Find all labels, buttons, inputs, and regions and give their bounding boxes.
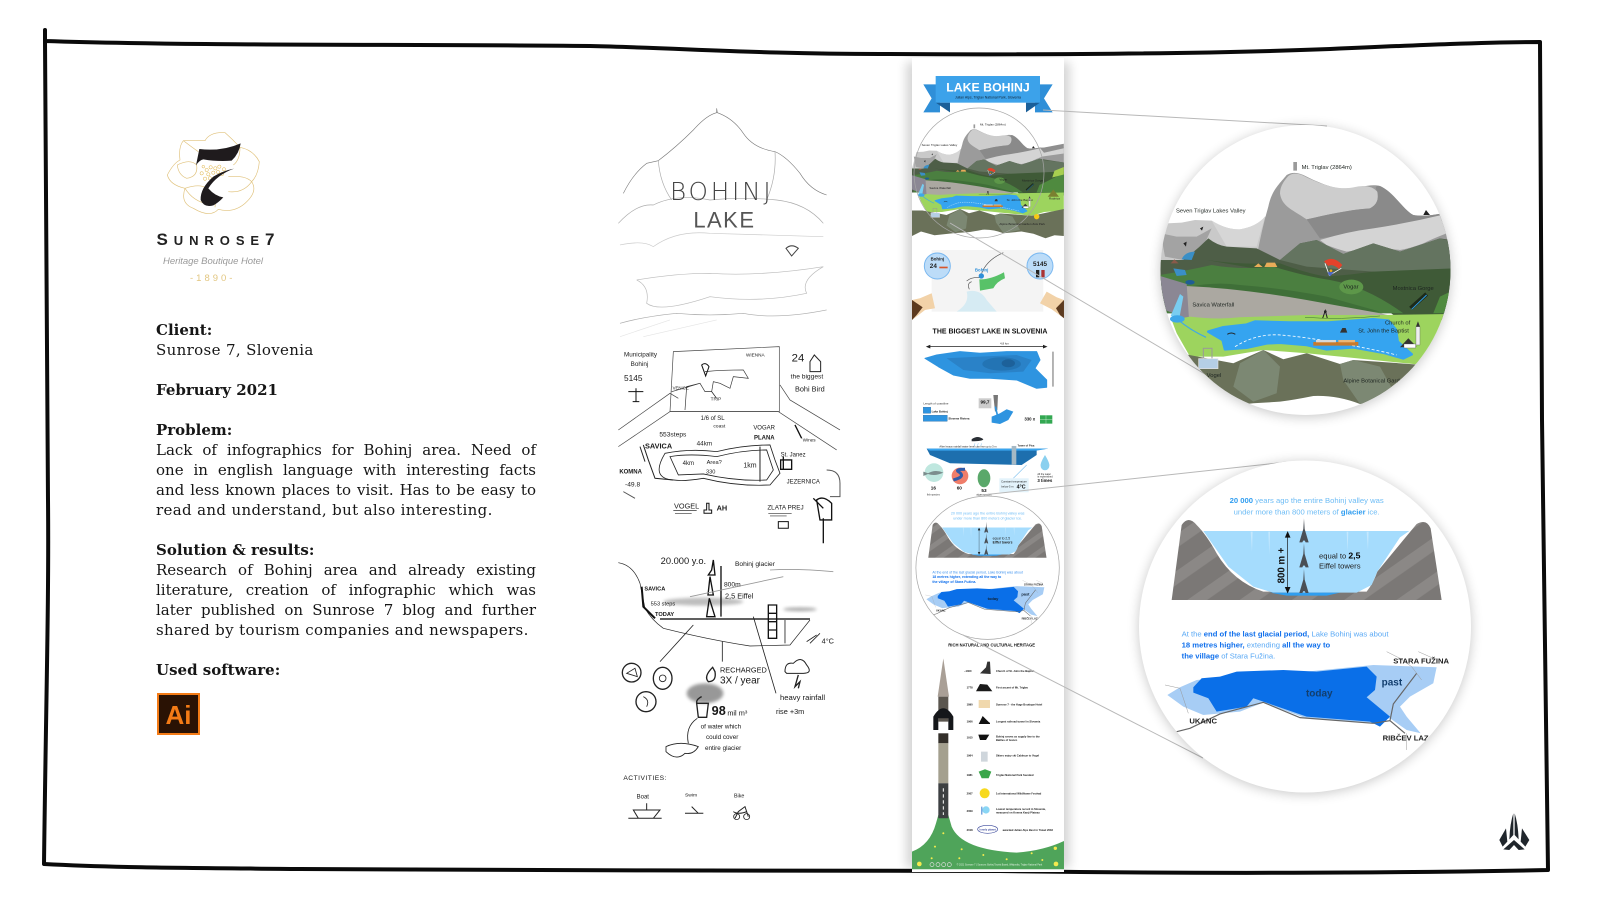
timeline entries: 1964: [967, 754, 973, 758]
hand sketch: first page (title, map, lake): KOMNA: [619, 469, 643, 475]
hand sketch: second page (glacier, rainfall, activities): 800m: [724, 582, 741, 589]
hand sketch: first page (title, map, lake): St. Janez: [781, 453, 806, 459]
biggest lake section: Lake Bohinj: [932, 409, 948, 413]
connector lines from infographic to enlargements: [950, 110, 1327, 758]
cross-section section: is replenished: [1037, 476, 1053, 479]
hand sketch: first page (title, map, lake): 553steps: [659, 432, 687, 439]
timeline entries: 1915: [967, 735, 973, 739]
timeline entries: Skiers enjoy ski Cablecar to Vogel: [996, 754, 1039, 758]
sketch lettering: title: BOHINJ: [670, 177, 777, 206]
hand sketch: first page (title, map, lake): WIENNA: [746, 353, 766, 358]
hand sketch: second page (glacier, rainfall, activities): could cover: [706, 734, 738, 741]
fish icon: [925, 463, 943, 482]
location map section: [912, 250, 1064, 320]
glacier lens thumbnail: past: [1021, 591, 1030, 596]
project description: Problem:: [156, 420, 232, 438]
scene thumbnail labels: Rudnica: [1049, 196, 1060, 200]
hand sketch: second page (glacier, rainfall, activities): entire glacier: [705, 745, 741, 752]
software badge: Adobe Illustrator: Ai: [166, 700, 192, 730]
location map section: 24: [930, 263, 937, 270]
hand sketch: first page (title, map, lake): -49.8: [625, 482, 640, 489]
hand sketch: first page (title, map, lake): TRIP: [711, 397, 721, 402]
timeline icons: lonely planet: [980, 828, 996, 832]
hand sketch: first page (title, map, lake): 1km: [743, 462, 757, 469]
client logo: Sunrose 7: [156, 133, 274, 284]
biggest lake section: Length of coastline: [923, 401, 949, 405]
location map section: Bohinj: [975, 267, 988, 272]
timeline entries: 1778: [967, 686, 973, 690]
logo tagline: Heritage Boutique Hotel: [163, 256, 264, 267]
timeline entries: 1906: [967, 719, 973, 723]
project description: later published on Sunrose 7 blog and further: [156, 600, 536, 618]
hand sketch: first page (title, map, lake): Area?: [707, 460, 722, 466]
cross-section section: After heavy rainfall water level can rise up to 3 m: [939, 444, 997, 448]
timeline entries: Triglav National Park founded: [996, 773, 1034, 777]
cross-section section: below 5 m: [1001, 484, 1014, 488]
lake area fact: 330 x: [1024, 417, 1036, 422]
hand sketch: second page (glacier, rainfall, activities): Boat: [637, 794, 649, 800]
scene labels: Vogar: [1343, 285, 1359, 291]
glacier lens thumbnail: 18 metres higher, extending all the way to: [932, 575, 1001, 579]
cross-section section: Tower of Pisa: [1017, 444, 1035, 448]
glacier labels: the village of Stara Fužina.: [1182, 651, 1275, 660]
hand sketch: second page (glacier, rainfall, activities): 4°C: [822, 636, 835, 645]
cross-section section: Constant temperature: [1001, 480, 1027, 484]
hand sketch: first page (title, map, lake): 330: [706, 469, 715, 475]
scene labels: Church of: [1385, 320, 1411, 326]
hand sketch: first page (title, map, lake): 4km: [683, 461, 694, 467]
glacier labels: under more than 800 meters of glacier ice.: [1234, 507, 1380, 516]
glacier labels: 800 m +: [1277, 547, 1288, 583]
project description: Solution & results:: [156, 540, 314, 558]
hand sketch: second page (glacier, rainfall, activities): RECHARGED: [720, 665, 767, 674]
glacier labels: UKANC: [1189, 716, 1217, 725]
glacier lens thumbnail: [925, 512, 1047, 623]
glacier labels: 18 metres higher, extending all the way to: [1182, 640, 1331, 649]
timeline heading: RICH NATURAL AND CULTURAL HERITAGE: [948, 643, 1035, 648]
timeline entries: Church of St. John the Baptist: [996, 669, 1034, 673]
scene labels: Mostnica Gorge: [1393, 286, 1434, 292]
scene thumbnail labels: Seven Triglav Lakes Valley: [922, 143, 958, 147]
hand sketch: second page (glacier, rainfall, activities): ACTIVITIES:: [623, 775, 667, 782]
glacier lens thumbnail: RIBČEV LAZ: [1022, 615, 1038, 620]
hand sketch: second page (glacier, rainfall, activities): Swim: [685, 793, 697, 799]
project description: Sunrose 7, Slovenia: [156, 340, 314, 358]
timeline entries: First ascent of Mt. Triglav: [996, 686, 1029, 690]
project description: shared by tourism companies and newspapers.: [156, 620, 529, 638]
project description: and less known places to visit. Has to be easy to: [156, 480, 536, 498]
hand sketch: second page (glacier, rainfall, activities): 553 steps: [651, 602, 675, 608]
scene labels: Savica Waterfall: [1192, 303, 1234, 309]
volume infographic: [979, 398, 991, 408]
hand sketch: first page (title, map, lake): Municipality: [624, 352, 658, 359]
hand sketch: second page (glacier, rainfall, activities): Bohinj glacier: [735, 561, 776, 568]
glacier lens thumbnail: under more than 800 meters of glacier ice.: [953, 517, 1022, 521]
project description: literature, creation of infographic which was: [156, 580, 536, 598]
hand sketch: first page (title, map, lake): AH: [717, 504, 727, 513]
project description: Research of Bohinj area and already existing: [156, 560, 536, 578]
scene thumbnail labels: Savica Waterfall: [929, 186, 951, 190]
project description: February 2021: [156, 380, 278, 398]
glacier lens thumbnail: today: [988, 596, 999, 601]
hand sketch: first page (title, map, lake): LAKE: [693, 207, 759, 232]
hand sketch: first page (title, map, lake): 5145: [624, 373, 643, 383]
scene labels: Alpine Botanical Garden: [1343, 379, 1406, 385]
project description: Client:: [156, 320, 212, 338]
location map section: Bohinj: [931, 257, 944, 262]
timeline entries: measured on Komna Kanji Plateau: [996, 811, 1040, 815]
glacier lens thumbnail: 20 000 years ago the entire Bohinj valley was: [951, 512, 1025, 516]
banner subtitle: Julian Alps, Triglav National Park, Slovenia: [955, 95, 1021, 99]
hand sketch: first page (title, map, lake): Wines: [803, 438, 816, 443]
biggest lake section: Slovene Riviera: [948, 416, 970, 420]
glacier labels: past: [1382, 678, 1403, 689]
glacier lens thumbnail: the village of Stara Fužina.: [932, 580, 976, 584]
timeline entries: 1890: [967, 702, 973, 706]
scene thumbnail labels: St. John the Baptist: [1007, 198, 1033, 202]
glacier lens thumbnail: UKANC: [936, 608, 946, 612]
hand sketch: first page (title, map, lake): coast: [713, 423, 726, 429]
glacier labels: today: [1306, 689, 1333, 700]
project description: Lack of infographics for Bohinj area. Need of: [156, 440, 536, 458]
scene labels: Mt. Triglav (2864m): [1302, 165, 1352, 171]
timeline entries: 1981: [967, 773, 973, 777]
timeline entries: 2009: [967, 809, 973, 813]
scene thumbnail labels: Alpine Botanical Garden Zois Park: [999, 222, 1045, 226]
hand sketch: second page (glacier, rainfall, activities): mil m³: [727, 709, 748, 718]
scene labels: St. John the Baptist: [1358, 328, 1409, 334]
hand sketch: first page (title, map, lake): 1/6 of SL: [701, 416, 725, 422]
glacier labels: STARA FUŽINA: [1393, 656, 1449, 665]
hand sketch: first page (title, map, lake): [618, 108, 840, 543]
hand sketch: first page (title, map, lake): PLANA: [754, 435, 775, 441]
timeline road illustration: © 2021 Sunrose 7 | Sources: Bohinj Tourist Board, Wikipedia, Triglav National Park: [957, 864, 1043, 867]
section heading: THE BIGGEST LAKE IN SLOVENIA: [933, 328, 1047, 335]
cross-section section: 4°C: [1017, 485, 1026, 491]
cross-section section: 60: [957, 485, 962, 490]
location map section: 5145: [1033, 261, 1048, 268]
biggest lake section: 4,8 km: [1000, 342, 1009, 346]
hand sketch: second page (glacier, rainfall, activities): SAVICA: [644, 587, 665, 593]
cross-section section: 53: [981, 488, 987, 493]
scene thumbnail labels: [922, 123, 1060, 226]
scene labels: [1176, 165, 1434, 385]
hand sketch: first page (title, map, lake): VENICE: [673, 385, 689, 390]
hand sketch: second page (glacier, rainfall, activities): heavy rainfall: [780, 693, 825, 702]
timeline entries: Battles of Isonzo: [996, 738, 1018, 742]
hand sketch: first page (title, map, lake): 24: [792, 353, 804, 365]
glacier labels: At the end of the last glacial period, Lake Bohinj was about: [1182, 629, 1389, 638]
hand sketch: first page (title, map, lake): 44km: [697, 440, 712, 447]
project description: one in english language with interesting facts: [156, 460, 536, 478]
glacier lens thumbnail: Eiffel towers: [993, 541, 1013, 545]
logo wordmark: S UNROSE 7: [156, 230, 274, 249]
hand sketch: first page (title, map, lake): VOGEL: [674, 501, 699, 510]
cross-section section: All the water: [1037, 473, 1051, 476]
hand sketch: first page (title, map, lake): ZLATA PREJ: [767, 504, 804, 511]
hand sketch: first page (title, map, lake): Bohi Bird: [795, 385, 825, 394]
glacier labels: [1182, 496, 1449, 743]
timeline entries: 2018: [967, 828, 973, 832]
scene thumbnail labels: Mt. Triglav (2864m): [980, 123, 1006, 127]
hand sketch: second page (glacier, rainfall, activities): of water which: [701, 723, 742, 730]
hand sketch: second page (glacier, rainfall, activities): [618, 556, 835, 820]
glacier labels: equal to 2,5: [1319, 551, 1361, 561]
hand sketch: second page (glacier, rainfall, activities): 98: [712, 704, 726, 718]
hand sketch: second page (glacier, rainfall, activities): 2,5 Eiffel: [725, 591, 754, 600]
timeline entries: ~1300: [964, 669, 972, 673]
timeline icons: [976, 662, 998, 833]
water drop: [1041, 455, 1049, 470]
constant temperature callout: [999, 478, 1029, 492]
project description: [156, 320, 537, 678]
scene labels: Seven Triglav Lakes Valley: [1176, 209, 1246, 215]
timeline entries: [964, 669, 1053, 832]
project description: Used software:: [156, 660, 280, 678]
timeline entries: 2007: [967, 791, 973, 795]
logo year: -1890-: [190, 273, 235, 284]
scene labels: Vogel: [1207, 373, 1221, 379]
timeline entries: 1st International Wildflower Festival: [996, 791, 1042, 795]
timeline entries: Bohinj serves as supply line to the: [996, 734, 1040, 738]
cross-section section: 16: [931, 485, 936, 490]
cross-section section: [923, 437, 1053, 496]
enlargement: glacier and former lake: [1139, 460, 1471, 794]
timeline road illustration: [912, 658, 1064, 869]
cross-section section: fish species: [927, 493, 941, 496]
sketch lettering: glacier notes: 20.000 y.o.: [661, 556, 706, 566]
timeline entries: Lowest temperature record in Slovenia,: [996, 807, 1046, 811]
scene thumbnail labels: Vogar: [999, 178, 1007, 182]
banner title: LAKE BOHINJ: [946, 81, 1030, 95]
glacier labels: 20 000 years ago the entire Bohinj valley was: [1230, 496, 1384, 505]
lake depth map: [925, 352, 1047, 388]
biggest lake section: [923, 328, 1053, 424]
logo flower: [167, 133, 259, 214]
title banner: [923, 76, 1053, 112]
scene thumbnail labels: Mostnica Gorge: [1022, 178, 1043, 182]
hand sketch: first page (title, map, lake): SAVICA: [645, 441, 673, 450]
plant icon: [978, 469, 990, 487]
hand sketch: first page (title, map, lake): JEZERNICA: [787, 479, 820, 485]
mountain scene thumbnail: [912, 124, 1064, 238]
hand sketch: first page (title, map, lake): VOGAR: [753, 425, 776, 431]
timeline entries: Longest railroad tunnel in Slovenia: [996, 719, 1041, 723]
heritage timeline: [912, 643, 1064, 869]
hand sketch: first page (title, map, lake): the biggest: [791, 373, 823, 380]
infographic panel: [906, 58, 1070, 872]
glacier labels: Eiffel towers: [1319, 562, 1361, 571]
glacier lens thumbnail: STARA FUŽINA: [1024, 581, 1043, 586]
glacier labels: RIBČEV LAZ: [1383, 734, 1429, 743]
lens outline around glacier: [916, 496, 1059, 639]
hand sketch: second page (glacier, rainfall, activities): rise +3m: [776, 707, 804, 716]
logo numeral seven: [196, 143, 241, 206]
timeline entries: awarded Julian Alps Best in Travel 2018: [1003, 828, 1053, 832]
coastline bars: [923, 407, 931, 413]
hand sketch: second page (glacier, rainfall, activities): Bike: [734, 793, 744, 799]
bird icon: [952, 468, 968, 484]
cross-section section: 3 times: [1037, 478, 1053, 483]
cross-section section: algae species: [976, 493, 992, 496]
enlargement: mountain scene: [1157, 125, 1494, 417]
hand sketch: second page (glacier, rainfall, activities): 3X / year: [720, 675, 761, 686]
lens outline around scene: [914, 108, 1044, 238]
glacier lens thumbnail: equal to 2,5: [993, 536, 1010, 540]
biggest lake section: 99,7: [980, 399, 990, 404]
hand sketch: first page (title, map, lake): Bohinj: [631, 361, 648, 368]
project description: read and understand, but also interesting.: [156, 500, 493, 518]
software badge: Adobe Illustrator: [158, 694, 199, 734]
glacier lens thumbnail: At the end of the last glacial period, Lake Bohinj was about: [932, 570, 1023, 574]
timeline entries: Sunrose 7 - the Huge Boutique Hotel: [996, 702, 1042, 706]
designer logo mark: [1499, 813, 1529, 850]
hand sketch: second page (glacier, rainfall, activities): TODAY: [655, 612, 674, 618]
